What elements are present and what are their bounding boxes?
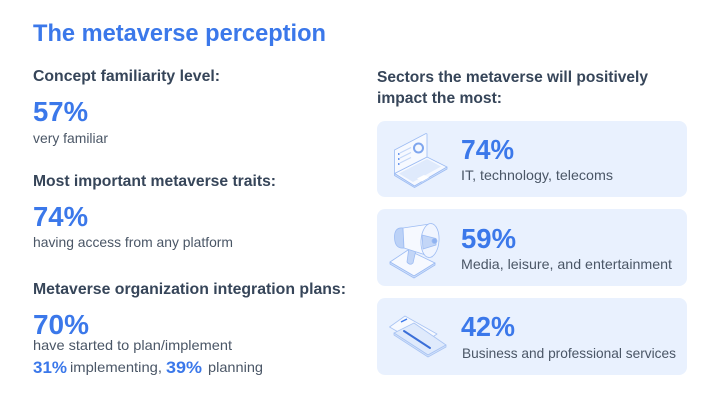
heading: sectors xyxy=(377,69,648,107)
breakdown line: implementing, xyxy=(70,359,162,375)
stat: 70%: 70% xyxy=(33,309,89,340)
stat: 59%: 59% xyxy=(461,223,516,254)
heading: sectors: Sectors the metaverse will positively xyxy=(377,69,648,86)
heading: concept familiarity: Concept familiarity level: xyxy=(33,68,220,85)
caption: very familiar: very familiar xyxy=(33,130,108,146)
stat: 57%: 57% xyxy=(33,96,88,127)
icon: megaphone xyxy=(390,223,440,278)
block: concept familiarity xyxy=(33,68,220,146)
stat: 42%: 42% xyxy=(461,311,515,342)
panel: business card xyxy=(377,298,687,375)
heading: integration plans: Metaverse organization integration plans: xyxy=(33,281,346,298)
caption: media: Media, leisure, and entertainment xyxy=(461,256,672,272)
breakdown line: 31% xyxy=(33,358,67,377)
breakdown line: planning xyxy=(208,359,263,375)
heading: sectors: impact the most: xyxy=(377,90,502,107)
stat: 74%: 74% xyxy=(33,201,88,232)
block: integration plans xyxy=(33,281,346,377)
caption: business: Business and professional services xyxy=(462,345,676,361)
title: The metaverse perception xyxy=(33,20,326,47)
icon: laptop xyxy=(394,134,447,188)
breakdown line: 39% xyxy=(166,358,202,377)
panel: IT card xyxy=(377,121,687,197)
breakdown line xyxy=(33,358,263,377)
stat: 74%: 74% xyxy=(461,134,514,165)
block: important traits xyxy=(33,173,276,250)
panel: media card xyxy=(377,209,687,286)
heading: important traits: Most important metaverse traits: xyxy=(33,173,276,190)
caption: IT: IT, technology, telecoms xyxy=(461,167,613,183)
icon: cards xyxy=(390,316,446,357)
caption: access: having access from any platform xyxy=(33,234,233,250)
caption: started: have started to plan/implement xyxy=(33,337,232,353)
